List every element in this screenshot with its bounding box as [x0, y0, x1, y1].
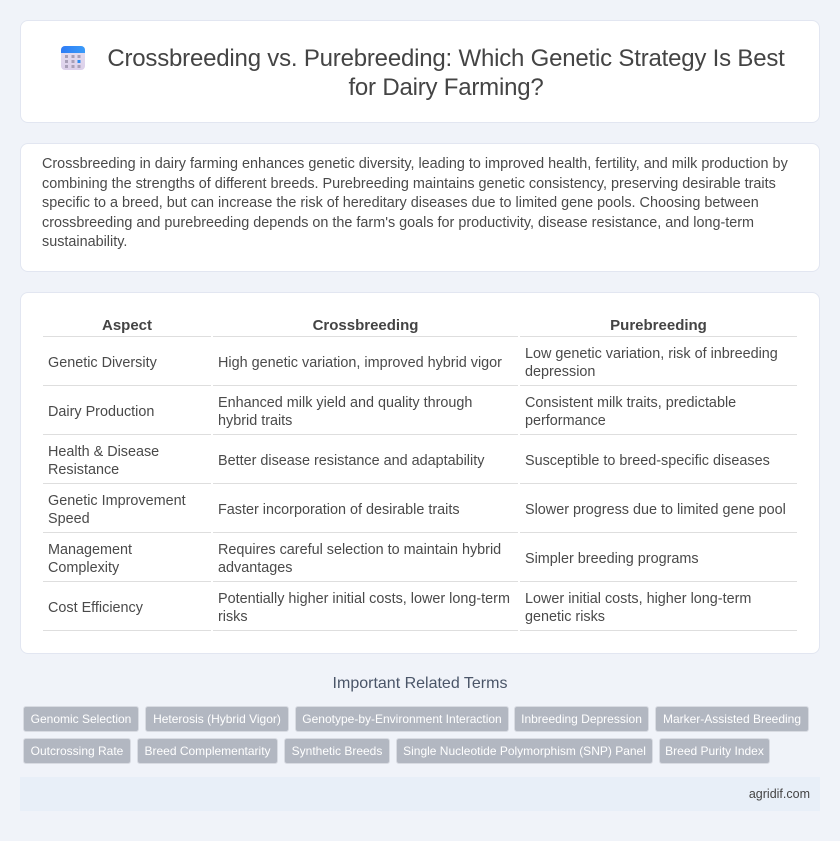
text: introduction paragraph: crossbreeding and purebreeding depends on the farm's goals for productivity, disease resistance, and long-term: [42, 215, 754, 231]
row: cost efficiency: Potentially higher initial costs, lower long-term: [218, 591, 510, 607]
tags: related terms: Outcrossing Rate: [31, 744, 123, 758]
row: dairy production: [48, 395, 736, 429]
row: cost efficiency: Lower initial costs, higher long-term: [525, 591, 751, 607]
row: genetic improvement speed: [48, 493, 786, 527]
row: genetic improvement speed: Faster incorporation of desirable traits: [218, 502, 460, 518]
row: dairy production: Dairy Production: [48, 404, 154, 420]
row: dairy production: performance: [525, 413, 606, 429]
row: genetic diversity: depression: [525, 364, 595, 380]
row: management complexity: [48, 542, 699, 576]
row: dairy production: Enhanced milk yield and quality through: [218, 395, 472, 411]
title: [107, 45, 785, 101]
tags: related terms: [23, 706, 809, 764]
text: introduction paragraph: Crossbreeding in dairy farming enhances genetic diversity, leading to improved health, fertility, and milk production by: [42, 156, 788, 172]
tags: related terms: Genotype-by-Environment Interaction: [302, 712, 502, 726]
text: introduction paragraph: sustainability.: [42, 234, 127, 250]
tags: related terms: Synthetic Breeds: [292, 744, 382, 758]
row: cost efficiency: Cost Efficiency: [48, 600, 143, 616]
row: management complexity: Requires careful selection to maintain hybrid: [218, 542, 501, 558]
text: source: agridif.com: [749, 787, 810, 801]
row: health and disease resistance: [48, 444, 770, 478]
row: management complexity: advantages: [218, 560, 292, 576]
row: cost efficiency: risks: [218, 609, 248, 625]
row: dairy production: Consistent milk traits, predictable: [525, 395, 736, 411]
row: health and disease resistance: Susceptible to breed-specific diseases: [525, 453, 770, 469]
row: genetic improvement speed: Genetic Improvement: [48, 493, 186, 509]
tags: related terms: Marker-Assisted Breeding: [663, 712, 801, 726]
row: genetic diversity: Low genetic variation, risk of inbreeding: [525, 346, 778, 362]
row: cost efficiency: genetic risks: [525, 609, 605, 625]
footer: [20, 777, 820, 811]
tags: related terms: Breed Complementarity: [144, 744, 271, 758]
heading: related terms: Important Related Terms: [333, 675, 507, 692]
tags: related terms: Heterosis (Hybrid Vigor): [153, 712, 281, 726]
row: genetic diversity: High genetic variation, improved hybrid vigor: [218, 355, 502, 371]
table header: purebreeding: Purebreeding: [610, 317, 707, 334]
row: management complexity: Simpler breeding programs: [525, 551, 699, 567]
row: genetic diversity: Genetic Diversity: [48, 355, 157, 371]
text: introduction paragraph: [42, 156, 788, 250]
row: health and disease resistance: Health & Disease: [48, 444, 159, 460]
table header: aspect: Aspect: [102, 317, 152, 334]
row: genetic diversity: [48, 346, 778, 380]
row: genetic improvement speed: Speed: [48, 511, 90, 527]
row: genetic improvement speed: Slower progress due to limited gene pool: [525, 502, 786, 518]
tags: related terms: Breed Purity Index: [665, 744, 764, 758]
row: health and disease resistance: Better disease resistance and adaptability: [218, 453, 484, 469]
icon: calendar: [61, 46, 85, 70]
title: Crossbreeding vs. Purebreeding: Which Genetic Strategy Is Best: [107, 45, 785, 72]
row: management complexity: Management: [48, 542, 132, 558]
text: introduction paragraph: specific to a breed, but can increase the risk of hereditary diseases due to limited gene pools. Choosing between: [42, 195, 759, 211]
row: cost efficiency: [48, 591, 751, 625]
panel: introduction: [20, 143, 820, 272]
text: introduction paragraph: combining the strengths of different breeds. Purebreeding maintains genetic consistency, preserving desirable traits: [42, 176, 776, 192]
tags: related terms: Inbreeding Depression: [521, 712, 642, 726]
row: health and disease resistance: Resistance: [48, 462, 119, 478]
panel: comparison table: [20, 292, 820, 654]
panel: header: [20, 20, 820, 123]
title: for Dairy Farming?: [348, 74, 544, 101]
tags: related terms: Single Nucleotide Polymorphism (SNP) Panel: [403, 744, 646, 758]
row: management complexity: Complexity: [48, 560, 119, 576]
tags: related terms: Genomic Selection: [31, 712, 131, 726]
row: dairy production: hybrid traits: [218, 413, 292, 429]
table header: crossbreeding: Crossbreeding: [313, 317, 418, 334]
